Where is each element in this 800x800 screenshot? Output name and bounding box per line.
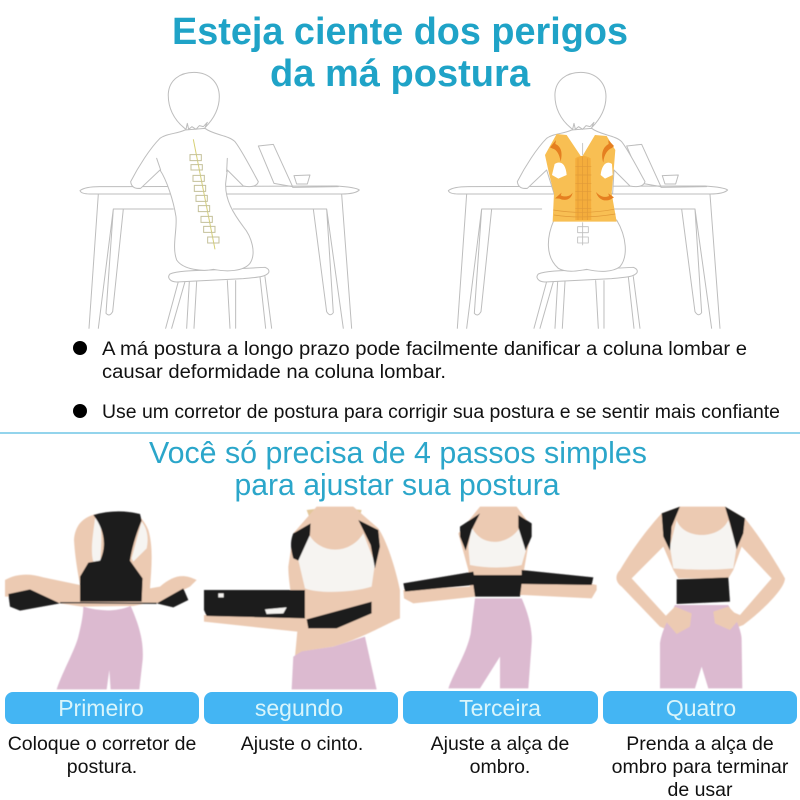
caption 4: ombro para terminar <box>612 756 789 778</box>
photo: step 2, fastening belt <box>204 507 400 689</box>
corrective arrows <box>550 140 614 200</box>
spine <box>190 139 219 249</box>
title: da má postura <box>270 53 531 95</box>
figure: seated person with curved spine <box>131 72 258 271</box>
caption 4: Prenda a alça de <box>626 733 774 755</box>
step captions <box>8 733 789 800</box>
bullet 1 <box>73 339 747 383</box>
photo: step 4, fully fastened <box>616 507 785 688</box>
illustration: poor posture at desk <box>80 72 359 328</box>
button: segundo: segundo <box>255 695 343 721</box>
button: segundo <box>204 692 398 724</box>
button: Primeiro <box>5 692 199 724</box>
bullet points <box>73 339 780 423</box>
caption 1 <box>8 733 196 778</box>
figure: seated person wearing brace <box>517 72 645 271</box>
button: Primeiro: Primeiro <box>58 695 144 721</box>
caption 3: Ajuste a alça de <box>431 733 569 755</box>
caption 1: Coloque o corretor de <box>8 733 196 755</box>
caption 2: Ajuste o cinto. <box>241 733 363 755</box>
lower spine <box>578 143 588 245</box>
caption 1: postura. <box>67 756 137 778</box>
bullet 2: Use um corretor de postura para corrigir sua postura e se sentir mais confiante <box>102 402 780 423</box>
button: Terceira: Terceira <box>459 695 541 721</box>
bullet 1: A má postura a longo prazo pode facilmente danificar a coluna lombar e <box>102 339 747 360</box>
step labels <box>5 691 797 724</box>
caption 4 <box>612 733 789 800</box>
illustration: corrected posture with brace <box>448 72 728 328</box>
photo: step 1, back view <box>5 511 197 689</box>
subtitle: para ajustar sua postura <box>234 467 560 502</box>
button: Quatro: Quatro <box>666 695 736 721</box>
caption 3 <box>431 733 569 778</box>
subtitle: Você só precisa de 4 passos simples <box>149 435 647 470</box>
photo: step 3, stretching belt <box>403 507 597 688</box>
button: Terceira <box>403 691 598 724</box>
bullet 1: causar deformidade na coluna lombar. <box>102 362 446 383</box>
button: Quatro <box>603 691 797 724</box>
caption 3: ombro. <box>470 756 530 778</box>
subtitle <box>149 435 647 502</box>
title <box>172 11 628 95</box>
brace vest <box>545 134 617 222</box>
title: Esteja ciente dos perigos <box>172 11 628 53</box>
